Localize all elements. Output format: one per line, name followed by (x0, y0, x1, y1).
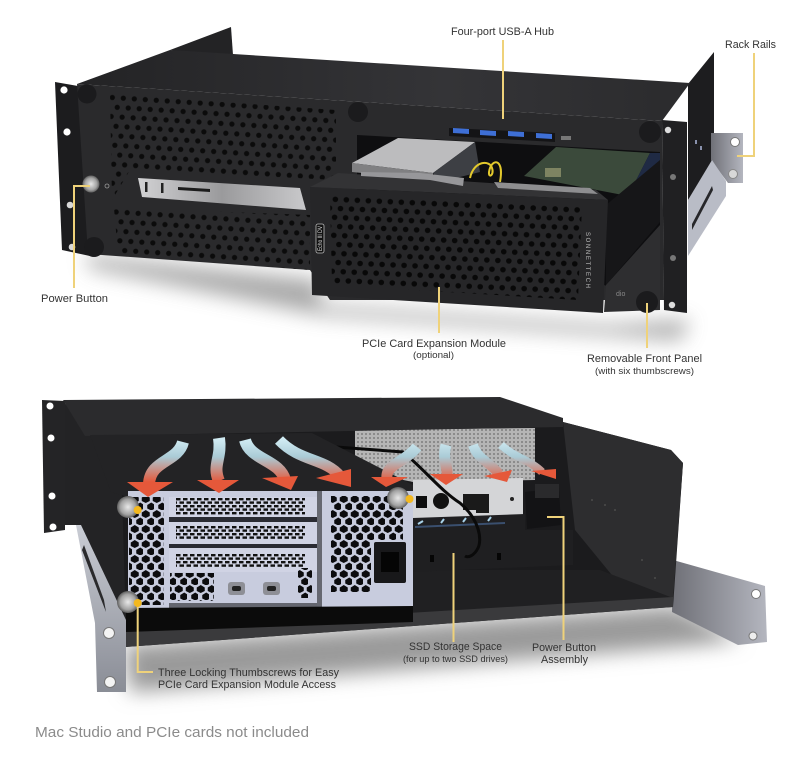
label: power button: Power Button (41, 293, 108, 305)
left rack ear bottom (42, 400, 65, 533)
airflow arrows (127, 438, 556, 497)
rear flanges (170, 27, 714, 200)
bottom chassis: rear view (42, 397, 767, 692)
label: power button assembly line 2: Assembly (541, 654, 588, 666)
wall rivets (591, 499, 656, 579)
rear port caption: dio (616, 291, 625, 298)
top chassis: front view with expansion module (55, 27, 754, 348)
label: expansion module: PCIe Card Expansion Module (362, 338, 506, 350)
SSD tray (352, 138, 480, 182)
label: rack rails: Rack Rails (725, 39, 776, 51)
module front (310, 187, 608, 313)
left side wall (64, 402, 126, 625)
IEC power socket (374, 542, 406, 583)
drop shadow under top chassis (85, 255, 690, 340)
arrow 4 (279, 440, 351, 487)
module top (310, 173, 608, 200)
perforated area lower (114, 208, 310, 270)
module side wall (606, 160, 660, 285)
module badge: Echo III DV (318, 226, 324, 251)
arrow 5 (371, 447, 417, 487)
label: SSD note: (for up to two SSD drives) (403, 654, 508, 664)
left rack ear (55, 82, 90, 256)
PSU hex vent (331, 496, 371, 592)
module rear PCIe panel (128, 491, 413, 608)
left rack rail (76, 525, 126, 692)
base plate (126, 570, 673, 630)
label: optional note: (optional) (413, 350, 454, 360)
power button (82, 176, 100, 192)
locking thumbscrews (117, 487, 409, 613)
power cable (336, 447, 480, 557)
rack rail right (688, 133, 743, 256)
arrow 3 (245, 440, 298, 490)
lower hex vent right (298, 568, 312, 598)
power icon (105, 184, 109, 188)
thumbscrews top chassis (78, 84, 661, 313)
module perforation (330, 195, 582, 300)
USB hub strip (449, 128, 571, 142)
power button assembly (525, 484, 561, 529)
interior back (90, 422, 683, 647)
PCIe slot cover 3 (169, 544, 317, 572)
gold leader lines bottom (138, 517, 563, 672)
module top surface (90, 433, 413, 497)
interior right wall (563, 422, 683, 600)
gold leader lines top (74, 40, 754, 348)
PCIe slot cover 1 (169, 497, 317, 517)
lower corner panel (604, 225, 660, 312)
drop shadow under bottom chassis (125, 606, 740, 692)
arrow 1 (127, 442, 183, 497)
module badge (316, 224, 324, 253)
PCIe card (524, 147, 660, 225)
label: SSD storage: SSD Storage Space (409, 641, 502, 653)
arrow 6 (430, 445, 463, 485)
arrow 8 (501, 445, 556, 479)
dark cavity under module (126, 606, 413, 632)
SSD storage tray (413, 514, 573, 572)
Mac Studio front face (138, 178, 306, 210)
right rack ear (662, 120, 687, 313)
left hex vent (129, 497, 164, 605)
gold thumbscrew markers (134, 495, 413, 607)
PCIe slot cover 2 (169, 517, 317, 544)
divider (317, 491, 322, 608)
label: power button assembly line 1: Power Button (532, 642, 596, 654)
module logo: SONNETTECH (584, 232, 590, 288)
Mac Studio rear mesh (355, 428, 535, 482)
label: thumbscrews line 1: Three Locking Thumbscrews for Easy (158, 667, 339, 679)
label: thumbscrews line 2: PCIe Card Expansion Module Access (158, 679, 336, 691)
label: USB hub: Four-port USB-A Hub (451, 26, 554, 38)
front panel (77, 84, 664, 300)
panel body (128, 491, 413, 608)
label: thumbscrews note: (with six thumbscrews) (595, 366, 694, 376)
perforated area upper (110, 94, 336, 200)
right rack rail (672, 560, 767, 645)
top surface (77, 50, 690, 121)
label: front panel: Removable Front Panel (587, 353, 702, 365)
open bay (357, 135, 660, 302)
yellow cable (470, 162, 501, 182)
lower hex vent left (170, 573, 214, 601)
PCIe card expansion module (310, 172, 608, 313)
arrow 2 (197, 438, 239, 493)
footnote: Mac Studio and PCIe cards not included (35, 724, 309, 741)
Mac Studio rear ports (413, 478, 523, 521)
Thunderbolt ports (228, 582, 280, 595)
chassis lid (63, 397, 563, 436)
base shadow (169, 603, 317, 608)
arrow 7 (473, 445, 512, 482)
